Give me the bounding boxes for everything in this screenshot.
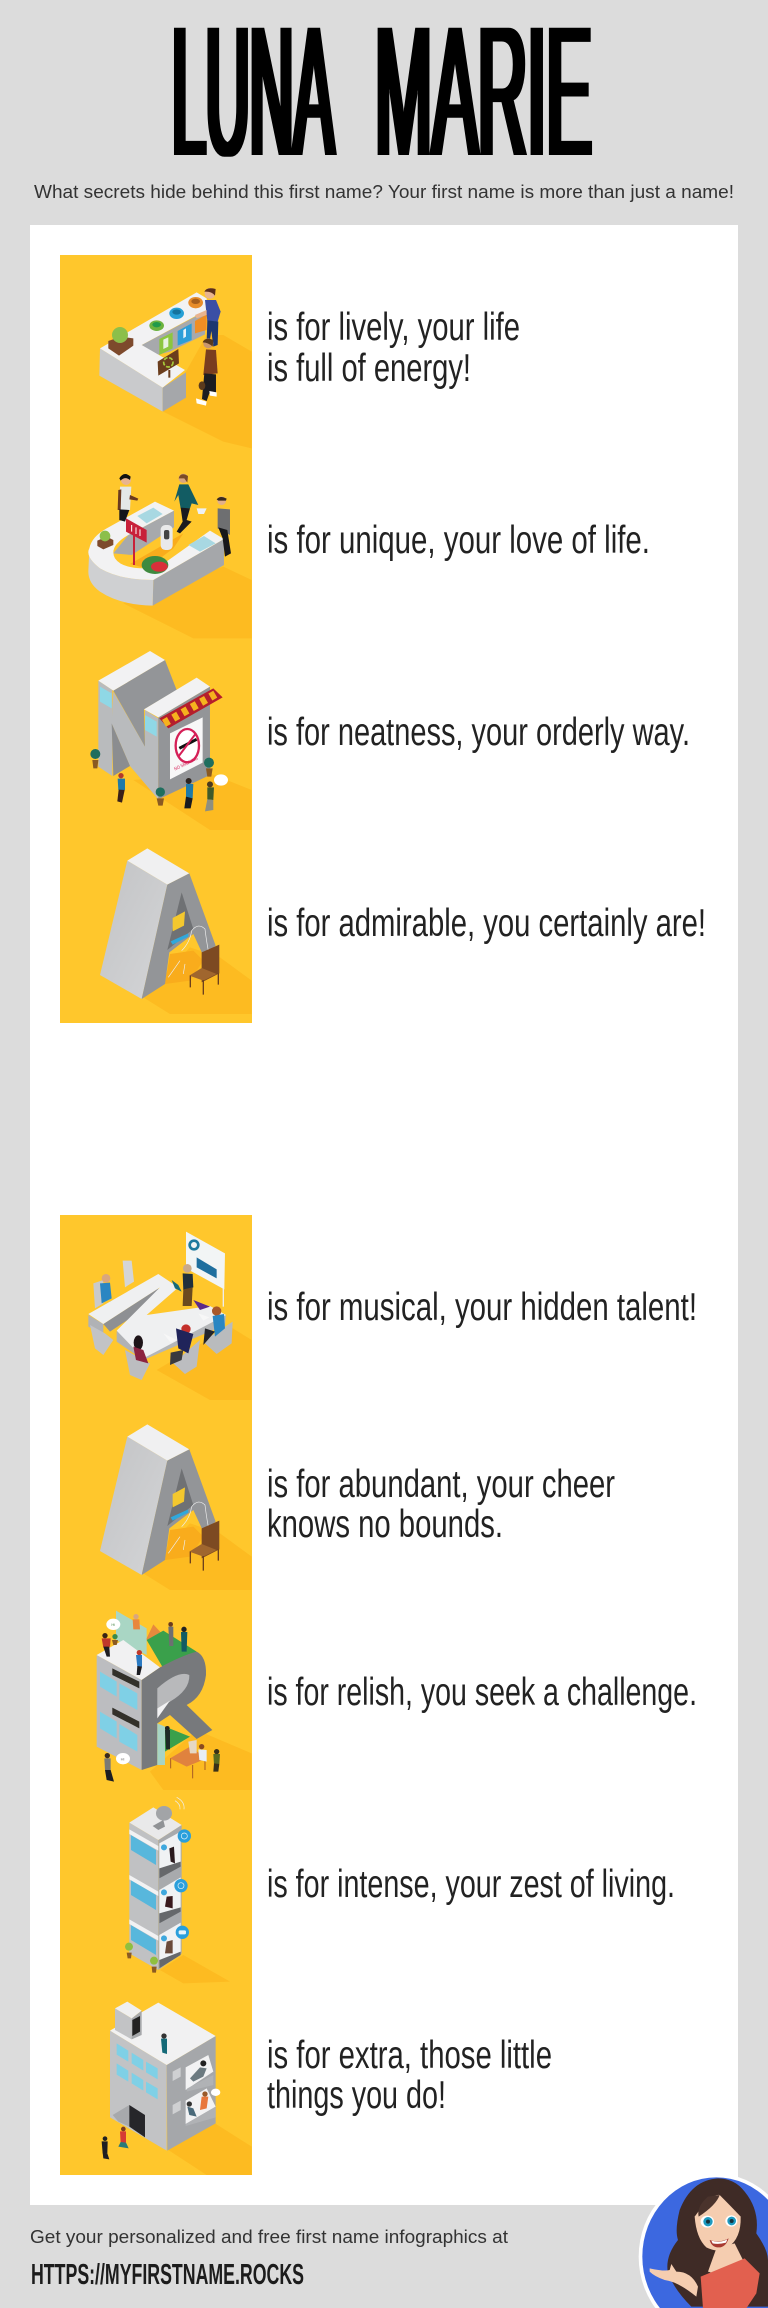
text: A line 2 [267,1463,615,1546]
icon: avatar woman [639,2174,768,2308]
text: L line: is for lively, your life [267,306,520,349]
text: A line 2: is for abundant, your cheer [267,1463,615,1506]
text: L line [267,306,520,390]
icon: letter U food counter [88,474,252,638]
text: E line: things you do! [267,2074,446,2117]
icon: letter N shop building: NO SMOKING [173,756,199,772]
subtitle: What secrets hide behind this first name? Your first name is more than just a name! [34,182,734,202]
icon: letter L recycling counter [99,288,252,448]
icon: letter R office: Hi [121,1756,125,1761]
text: E line [267,2034,552,2117]
footer url: HTTPS://MYFIRSTNAME.ROCKS [31,2259,304,2291]
footer text: Get your personalized and free first name infographics at [30,2227,508,2247]
icon: letter A workspace [100,1424,252,1590]
icon: letter R office: Hi [111,1622,115,1627]
icon: letter R office [97,1611,252,1790]
text: A line 2: knows no bounds. [267,1503,503,1546]
panel: yellow strip LUNA [60,255,252,1023]
icon: letter E building [102,2002,252,2175]
panel: white content card [30,225,738,2205]
icon: letter M meeting table [88,1232,252,1400]
icon: letter I tower [125,1797,230,1983]
icon: letter A workspace [100,848,252,1014]
text: E line: is for extra, those little [267,2034,552,2077]
text: L line: is full of energy! [267,347,471,390]
text: U line: is for unique, your love of life. [267,519,650,562]
panel: yellow strip MARIE [60,1215,252,2175]
icon: letter N shop building [90,651,252,830]
